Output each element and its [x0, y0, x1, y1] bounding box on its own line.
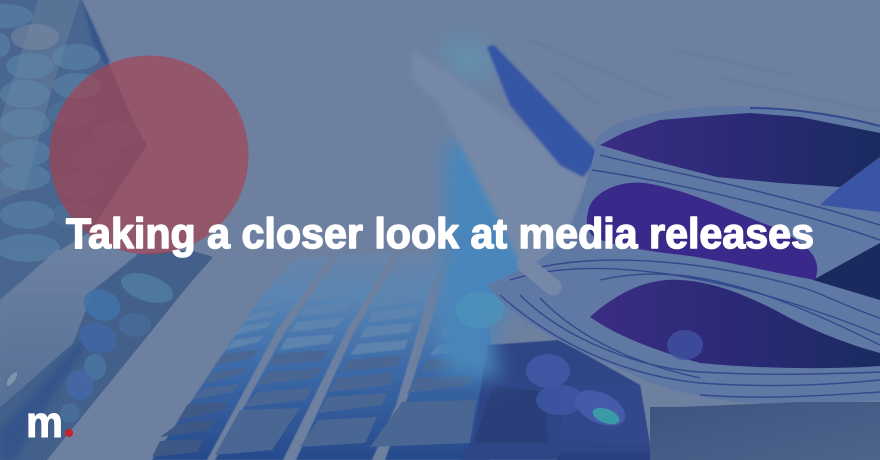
logo letter m: m — [26, 398, 63, 447]
keyboard near keys — [152, 350, 476, 457]
dark wedge beside keyboard — [0, 250, 213, 460]
blue blur behind newspapers — [440, 135, 550, 380]
bokeh ovals — [456, 292, 703, 433]
translucent ovals on wedge — [60, 226, 177, 423]
laptop edge band — [0, 250, 137, 407]
logo red dot — [65, 429, 73, 437]
newspaper fold lines — [500, 108, 880, 397]
pale paper band — [412, 50, 590, 272]
newspaper dark lens 2 — [587, 183, 817, 280]
keyboard far rows — [226, 278, 470, 355]
laptop screen with dot pattern — [0, 0, 147, 305]
newspaper blue panel right — [820, 157, 880, 212]
right side dark keys — [460, 340, 652, 460]
newspaper dark lens 1 — [600, 113, 880, 187]
logo — [26, 398, 73, 447]
keyboard column underlays — [152, 253, 490, 460]
trackpad — [650, 402, 880, 460]
newspaper print lines — [530, 40, 880, 112]
newspaper paper stack — [487, 106, 880, 405]
newspaper edge knob — [525, 264, 553, 287]
red circle — [50, 56, 248, 254]
newspaper dark lens 3 — [590, 280, 880, 368]
title: Taking a closer look at media releases — [66, 210, 814, 258]
newspaper dark panel 3 — [813, 243, 880, 300]
newspaper top sheet shadow — [487, 45, 600, 177]
